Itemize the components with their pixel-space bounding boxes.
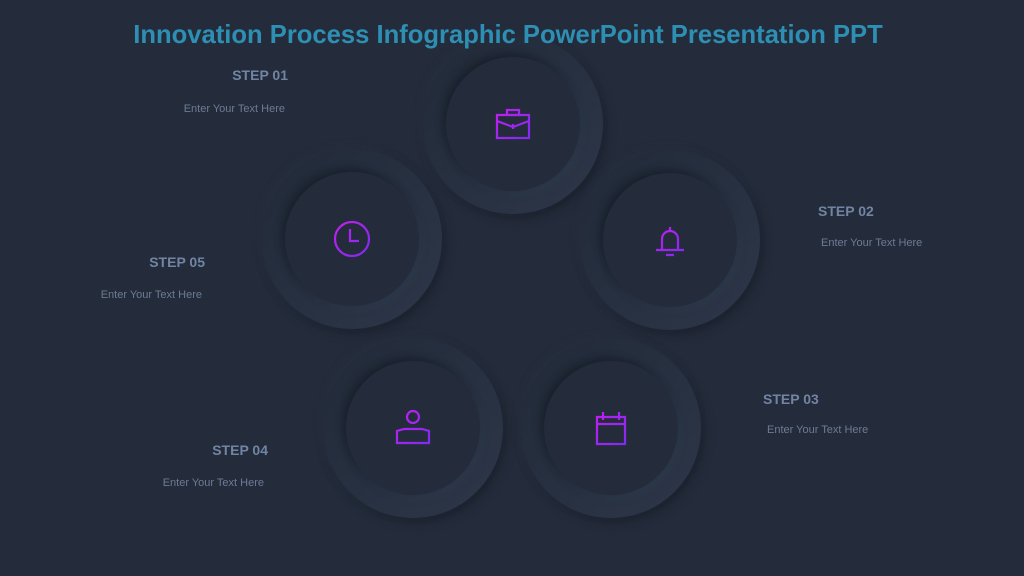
text: step 05: [101, 254, 205, 301]
icon: person: [396, 410, 430, 444]
circle: step 04 person: [323, 338, 503, 518]
text: step 04: [163, 442, 268, 489]
circle: step 03 calendar: [521, 338, 701, 518]
text: step 01: [184, 67, 288, 115]
circle: step 02 bell: [580, 150, 760, 330]
icon: briefcase: [496, 108, 530, 140]
text: step 01: Enter Your Text Here: [184, 103, 285, 115]
text: step 02: Enter Your Text Here: [821, 237, 922, 249]
circle: step 01 briefcase: [423, 34, 603, 214]
text: step 04: Enter Your Text Here: [163, 477, 264, 489]
circle: step 05 clock: [262, 149, 442, 329]
text: step 02: STEP 02: [818, 203, 874, 219]
title: Innovation Process Infographic PowerPoint Presentation PPT: [133, 21, 883, 49]
text: step 03: STEP 03: [763, 391, 819, 407]
text: step 02: [818, 203, 922, 249]
text: step 05: Enter Your Text Here: [101, 289, 202, 301]
icon: calendar: [596, 412, 626, 446]
text: step 04: STEP 04: [212, 442, 268, 458]
icon: bell: [656, 227, 684, 256]
icon: clock: [334, 220, 370, 258]
text: step 03: Enter Your Text Here: [767, 424, 868, 436]
text: step 01: STEP 01: [232, 67, 288, 83]
text: step 03: [763, 391, 868, 436]
text: step 05: STEP 05: [149, 254, 205, 270]
